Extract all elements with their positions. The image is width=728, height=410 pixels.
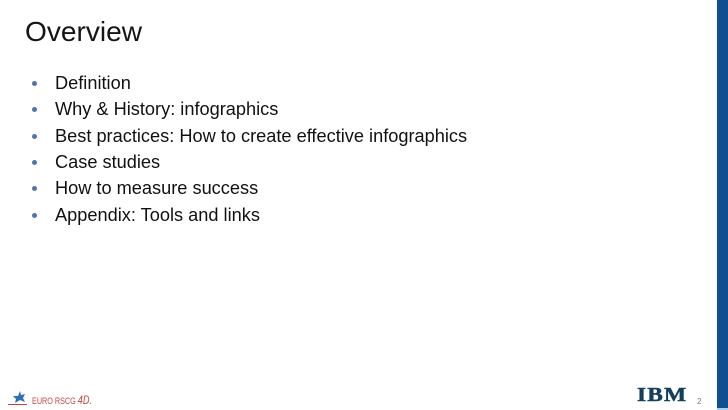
item: best practices: Best practices: How to create effective infographics [55,126,467,146]
item: appendix: Appendix: Tools and links [55,205,260,225]
light strip under blue bar [717,408,728,410]
logo: IBM: IBM [637,384,687,406]
item: case studies: Case studies [55,152,160,172]
item: definition: Definition [55,73,131,93]
page number: 2 [697,397,701,406]
title: Overview [25,16,142,47]
bullet list [32,73,467,225]
item: measure success: How to measure success [55,178,258,198]
icon: blue star [8,391,27,405]
item: why and history: Why & History: infographics [55,99,278,119]
logo text: EURO RSCG 4D. [32,393,92,407]
right blue bar [717,0,728,408]
logo: Euro RSCG 4D [8,391,92,407]
